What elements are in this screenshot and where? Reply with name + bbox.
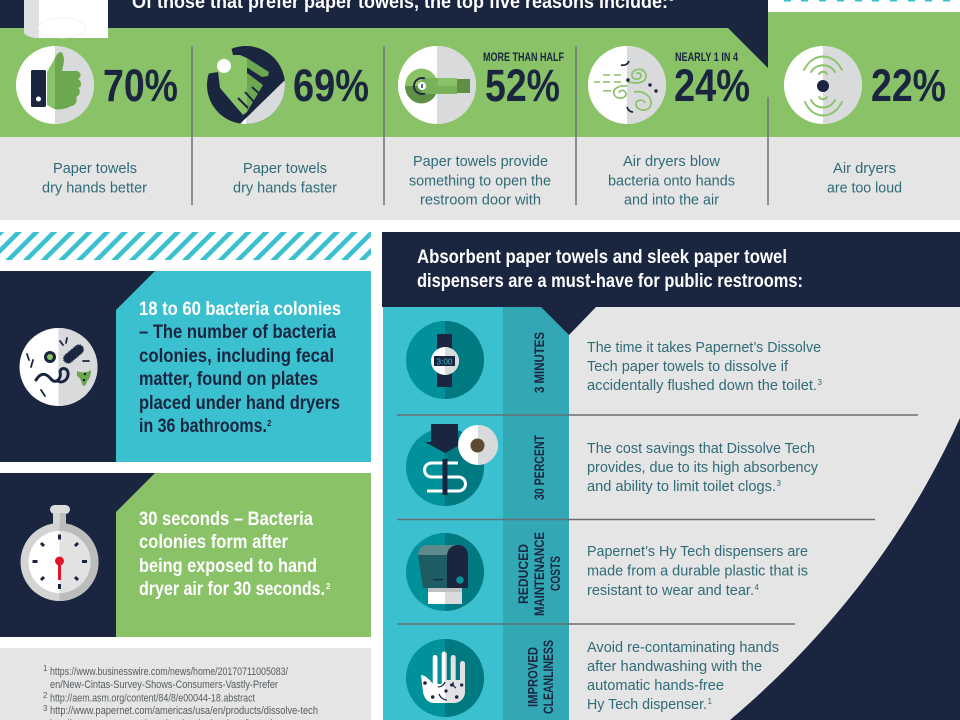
text: durable plastic: 4: [754, 583, 760, 592]
reason 1: [16, 46, 178, 196]
icon: paper towel roll: [24, 0, 108, 38]
icon: dispenser: [406, 533, 484, 611]
text: cost savings: The cost savings that Dissolve Tech: [587, 440, 815, 457]
text: 30 seconds: being exposed to hand: [139, 556, 317, 577]
icon: watch: 3:00: [436, 358, 453, 366]
text: open the door: restroom door with: [420, 192, 541, 208]
panel: footnotes: http://www.papernet.com/americas/usa/en/products/dissolve-tech: [50, 705, 318, 717]
text: open the door: something to open the: [409, 172, 551, 190]
label: more than half: MORE THAN HALF: [483, 52, 564, 64]
text: durable plastic: Papernet’s Hy Tech dispensers are: [587, 543, 808, 560]
icon: air and bacteria: [588, 46, 666, 124]
text: bacteria colonies: [139, 299, 341, 437]
stat: 22%: 22%: [871, 60, 946, 111]
text: bacteria colonies: placed under hand dryers: [139, 393, 340, 414]
text: 30 seconds: 30 seconds – Bacteria: [139, 509, 313, 530]
text: dissolve time: The time it takes Papernet’s Dissolve: [587, 339, 821, 356]
reason 2: [206, 46, 369, 196]
text: avoid re-contaminating: Hy Tech dispenser.: [587, 696, 707, 713]
text: durable plastic: [587, 543, 808, 599]
heading: must-have: [417, 247, 803, 292]
icon: loud sound: [784, 46, 862, 124]
text: cost savings: 3: [776, 479, 782, 488]
icon: thumbs up: [16, 46, 94, 124]
icon: handshake: [206, 46, 285, 130]
label: improved cleanliness: [526, 640, 556, 714]
panel: footnotes: 3: [43, 704, 48, 713]
label: 3 minutes: 3 MINUTES: [532, 332, 547, 393]
label: 30 percent: 30 PERCENT: [532, 434, 547, 500]
text: open the door: Paper towels provide: [413, 153, 548, 170]
text: dry hands faster: Paper towels: [243, 160, 327, 177]
reason 3: [398, 46, 564, 208]
stat: 24%: 24%: [674, 60, 750, 111]
text: 30 seconds: [139, 509, 331, 600]
text: blow bacteria: [608, 153, 735, 208]
panel: footnotes: en/New-Cintas-Survey-Shows-Consumers-Vastly-Prefer: [50, 679, 278, 691]
panel: must-have benefits: [382, 232, 960, 720]
panel: bacteria colonies: [0, 271, 371, 462]
text: too loud: [827, 160, 902, 196]
icon: stopwatch: [20, 505, 98, 601]
icon: bacteria: [20, 328, 98, 406]
label: reduced maintenance costs: MAINTENANCE: [532, 532, 547, 616]
text: 30 seconds: 2: [326, 582, 331, 591]
text: cost savings: and ability to limit toilet clogs.: [587, 478, 776, 495]
text: blow bacteria: and into the air: [624, 192, 719, 208]
text: bacteria colonies: – The number of bacteria: [139, 322, 336, 343]
text: bacteria colonies: 2: [267, 419, 272, 428]
text: dissolve time: Tech paper towels to dissolve if: [587, 358, 789, 375]
text: bacteria colonies: 18 to 60 bacteria colonies: [139, 299, 341, 320]
text: 30 seconds: dryer air for 30 seconds.: [139, 579, 325, 600]
reason 5: [784, 46, 946, 196]
reason 4: [588, 46, 750, 208]
text: blow bacteria: bacteria onto hands: [608, 172, 735, 190]
stat: 70%: 70%: [103, 60, 178, 111]
text: dissolve time: 3: [818, 378, 822, 387]
text: durable plastic: made from a durable plastic that is: [587, 562, 808, 580]
stat: 52%: 52%: [485, 60, 560, 111]
text: avoid re-contaminating: 1: [708, 697, 712, 706]
text: dissolve time: accidentally flushed down the toilet.: [587, 377, 817, 394]
icon: door handle: [398, 46, 476, 124]
label: improved cleanliness: IMPROVED: [526, 647, 540, 707]
panel: footnotes: 1: [43, 664, 48, 673]
label: improved cleanliness: CLEANLINESS: [541, 640, 556, 714]
icon: dirty hand: [406, 639, 484, 717]
text: too loud: are too loud: [827, 180, 902, 196]
row: 3 minutes: [406, 321, 822, 399]
heading: must-have: Absorbent paper towels and sleek paper towel: [417, 247, 787, 268]
text: avoid re-contaminating: after handwashing with the: [587, 658, 762, 675]
label: reduced maintenance costs: [516, 532, 563, 616]
text: open the door: [409, 153, 551, 208]
text: dry hands faster: [233, 160, 337, 196]
panel: footnotes: 2: [43, 691, 48, 700]
row: 30 percent: [406, 424, 818, 506]
row: improved cleanliness: [406, 639, 779, 717]
panel: footnotes: https://www.businesswire.com/news/home/20170711005083/: [50, 666, 289, 678]
text: too loud: Air dryers: [833, 160, 896, 177]
panel: 30 seconds: [0, 473, 371, 637]
panel: footnotes: [0, 648, 371, 720]
label: reduced maintenance costs: REDUCED: [516, 544, 531, 604]
row: reduced maintenance costs: [406, 532, 808, 616]
text: dry hands better: dry hands better: [42, 180, 147, 196]
stat: 69%: 69%: [293, 60, 369, 111]
text: dry hands better: Paper towels: [53, 160, 137, 177]
text: dry hands better: [42, 160, 147, 196]
text: bacteria colonies: colonies, including fecal: [139, 346, 334, 367]
label: nearly 1 in 4: NEARLY 1 IN 4: [675, 52, 738, 64]
text: bacteria colonies: matter, found on plates: [139, 369, 318, 390]
text: cost savings: [587, 440, 818, 495]
text: dissolve time: [587, 339, 822, 394]
label: reduced maintenance costs: COSTS: [548, 556, 563, 591]
icon: watch: [406, 321, 484, 399]
icon: savings roll: [406, 424, 498, 506]
text: cost savings: provides, due to its high absorbency: [587, 459, 818, 476]
text: 30 seconds: colonies form after: [139, 532, 289, 553]
text: avoid re-contaminating: automatic hands-free: [587, 677, 724, 694]
panel: footnotes: http://aem.asm.org/content/84/8/e00044-18.abstract: [50, 692, 255, 704]
text: durable plastic: resistant to wear and tear.: [587, 582, 754, 599]
text: blow bacteria: Air dryers blow: [623, 153, 720, 170]
text: avoid re-contaminating: Avoid re-contaminating hands: [587, 639, 779, 656]
text: dry hands faster: dry hands faster: [233, 180, 337, 196]
text: avoid re-contaminating: [587, 639, 779, 713]
panel: top reasons: [0, 0, 960, 220]
heading: must-have: dispensers are a must-have for public restrooms:: [417, 271, 803, 292]
text: bacteria colonies: in 36 bathrooms.: [139, 416, 267, 437]
